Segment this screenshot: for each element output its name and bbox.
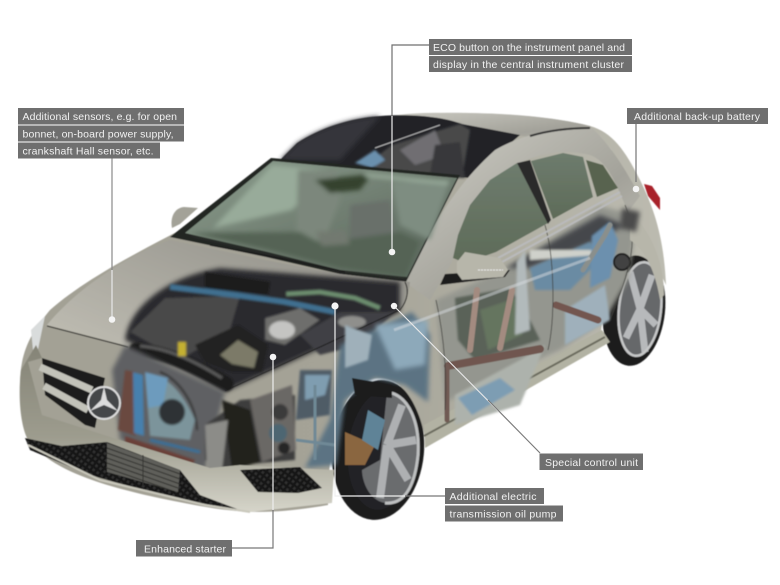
inner wheel arch structure [296, 312, 430, 468]
callout: back-up battery: Additional back-up battery [634, 111, 761, 123]
dark glass roof [280, 115, 520, 178]
lower bumper mesh [25, 438, 245, 512]
centre pillar [517, 160, 551, 224]
front compartment [112, 345, 225, 470]
top engine right [300, 312, 395, 355]
door cutaway interior [436, 206, 636, 402]
front bumper [20, 345, 334, 512]
structural members [447, 225, 630, 420]
callout: ECO button: display in the central instrument cluster [433, 59, 624, 71]
timing cover and belt drive [205, 370, 332, 470]
roof arch and pillar [405, 128, 640, 300]
front wheel and brake [342, 378, 422, 513]
callout: transmission oil pump: transmission oil pump [450, 508, 557, 520]
callout: additional sensors: bonnet, on-board power supply, [22, 128, 174, 140]
car body silhouette [20, 113, 666, 512]
callout: back-up battery [627, 108, 768, 192]
engine bay components [130, 272, 395, 384]
left door mirror [172, 207, 198, 228]
door shut lines [436, 205, 632, 410]
intake pipe [136, 350, 226, 384]
callout: additional sensors: crankshaft Hall sensor, etc. [22, 146, 154, 158]
air box [195, 325, 268, 372]
coolant hoses [170, 287, 335, 312]
exterior door mirror [440, 252, 510, 285]
callout: transmission oil pump [331, 302, 563, 522]
right side air intake [240, 467, 322, 493]
bumper bottom lip [28, 445, 250, 512]
callout: enhanced starter: Enhanced starter [144, 544, 226, 556]
callout: ECO button: ECO button on the instrument panel and [433, 42, 625, 54]
reservoir [265, 308, 320, 345]
rear quarter window [586, 160, 618, 197]
car illustration [20, 113, 671, 524]
callout: additional sensors: Additional sensors, e.g. for open [22, 111, 177, 123]
windscreen frame [170, 158, 460, 282]
rocker panel [424, 330, 610, 448]
callout: transmission oil pump: Additional electric [450, 491, 536, 503]
Mercedes star emblem [88, 387, 120, 419]
rear wheel [597, 251, 671, 369]
callout: enhanced starter [136, 354, 276, 556]
tail light [644, 184, 660, 210]
callout: ECO button [389, 39, 632, 255]
rear quarter panel shading [630, 212, 664, 300]
lower bumper louvres [107, 443, 180, 492]
radiator grille [40, 358, 105, 428]
cowl panel [205, 272, 270, 295]
wipers [210, 245, 345, 272]
engine cover [130, 296, 240, 360]
callout: special control unit [391, 303, 643, 470]
rear side window [531, 153, 593, 219]
callout: special control unit: Special control unit [545, 457, 638, 469]
front wheel tyre [326, 376, 430, 524]
front side window [453, 163, 548, 263]
headlight [31, 316, 45, 354]
seats and dashboard seen through windscreen [190, 165, 450, 276]
windscreen [185, 161, 457, 277]
radiator [118, 370, 200, 470]
interior through the roof [355, 124, 470, 178]
black hood cut lines [47, 282, 407, 391]
bonnet [47, 240, 410, 392]
roof [340, 113, 612, 150]
callout: additional sensors [18, 108, 184, 323]
